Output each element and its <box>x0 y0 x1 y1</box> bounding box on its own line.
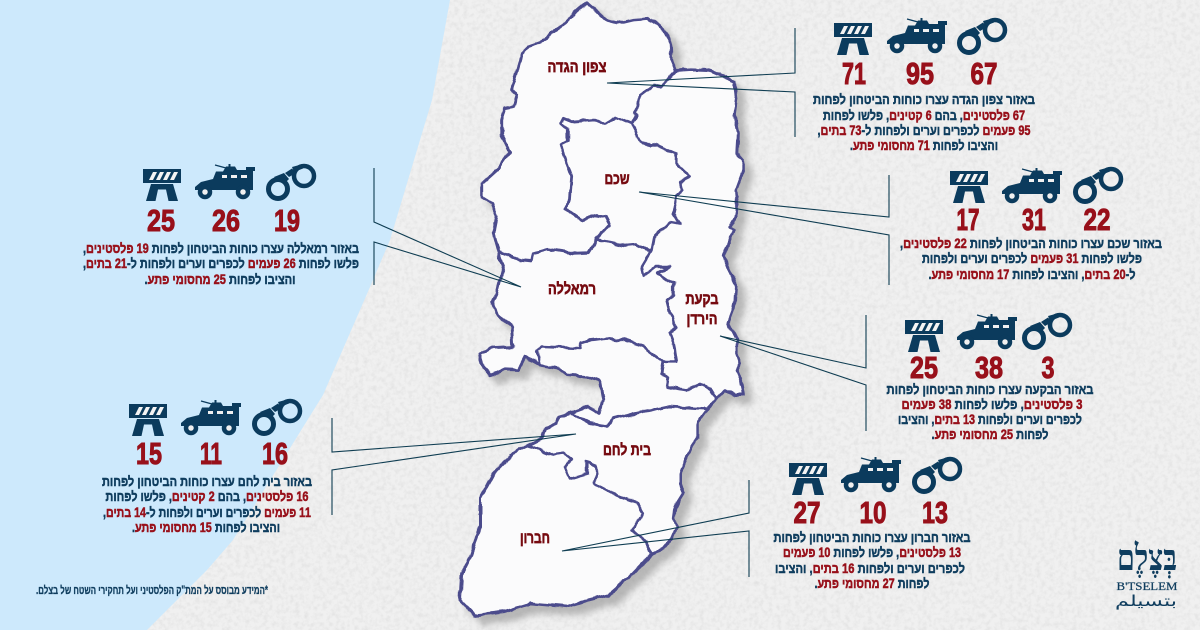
logo: Hebrew wordmark: בְּצֶלֶם <box>1117 538 1177 579</box>
text block: פלשו לפחות 31 פעמים לכפרים וערים ולפחות <box>922 251 1142 266</box>
icon: handcuffs <box>960 18 1005 52</box>
label: Nablus: שכם <box>604 171 630 188</box>
icon: handcuffs <box>1024 313 1070 348</box>
map labels <box>520 59 719 547</box>
text block <box>102 474 312 535</box>
icon: military vehicle <box>887 18 947 51</box>
icon: barricade <box>950 171 988 203</box>
label: northern West Bank: צפון הגדה <box>548 59 606 76</box>
text block: והציבו לפחות 25 מחסומי פתע. <box>144 272 296 287</box>
icon: barricade <box>789 463 827 495</box>
number: detained: 13 <box>922 495 948 530</box>
icon: barricade <box>129 404 167 436</box>
text block: והציבו לפחות 71 מחסומי פתע. <box>850 138 998 153</box>
text block <box>900 236 1162 282</box>
text block <box>813 92 1035 153</box>
text block: 16 פלסטינים, בהם 2 קטינים, פלשו לפחות <box>106 489 309 504</box>
label: Hebron: חברון <box>520 530 550 547</box>
label: Jordan Valley line 1: בקעת <box>686 291 719 308</box>
number: checkpoints: 27 <box>794 495 820 530</box>
text block: באזור בית לחם עצרו כוחות הביטחון לפחות <box>102 474 312 489</box>
icon: military vehicle <box>957 314 1017 347</box>
text block: פלשו לפחות 26 פעמים לכפרים וערים ולפחות ל-21 בתים, <box>83 256 359 271</box>
sea <box>0 0 450 630</box>
icon: barricade <box>834 23 872 55</box>
text block: באזור שכם עצרו כוחות הביטחון לפחות 22 פלסטינים, <box>900 236 1162 251</box>
text block: 67 פלסטינים, בהם 6 קטינים, פלשו לפחות <box>823 108 1025 123</box>
panel: Jordan Valley <box>886 313 1094 442</box>
number: detained: 3 <box>1042 350 1054 385</box>
number: raids: 38 <box>975 350 1003 385</box>
text block: באזור צפון הגדה עצרו כוחות הביטחון לפחות <box>813 92 1035 107</box>
text block: 3 פלסטינים, פלשו לפחות 38 פעמים <box>902 397 1083 412</box>
text block <box>886 382 1094 442</box>
panel: Nablus <box>900 167 1162 282</box>
internal district borders <box>499 71 717 553</box>
icon: handcuffs <box>254 399 300 434</box>
number: detained: 16 <box>262 436 288 471</box>
icon: barricade <box>905 320 943 352</box>
number: raids: 26 <box>212 203 240 238</box>
text block: באזור הבקעה עצרו כוחות הביטחון לפחות <box>886 382 1094 397</box>
text block <box>83 241 359 287</box>
label: Jordan Valley line 2: הירדן <box>686 311 718 328</box>
icon: handcuffs <box>268 164 314 198</box>
text block: באזור רמאללה עצרו כוחות הביטחון לפחות 19 פלסטינים, <box>83 241 359 256</box>
panel: Ramallah <box>83 164 359 287</box>
number: raids: 95 <box>906 56 934 91</box>
number: detained: 67 <box>970 56 998 91</box>
text block: והציבו לפחות 15 מחסומי פתע. <box>132 520 280 535</box>
number: detained: 19 <box>274 203 300 238</box>
leader lines: Ramallah <box>374 168 521 287</box>
text block: לפחות 25 מחסומי פתע. <box>932 427 1049 442</box>
logo: B'Tselem <box>1115 538 1178 610</box>
panel: northern West Bank <box>813 18 1035 153</box>
label: Bethlehem: בית לחם <box>603 442 651 459</box>
leader lines: Bethlehem <box>332 418 576 515</box>
icon: military vehicle <box>195 164 255 197</box>
leader lines: Hebron <box>562 480 749 577</box>
text block: 95 פעמים לכפרים וערים ולפחות ל-73 בתים, <box>818 123 1031 138</box>
number: detained: 22 <box>1084 202 1110 237</box>
number: raids: 31 <box>1022 202 1046 237</box>
leader lines: Nablus <box>639 175 889 285</box>
panel: Hebron <box>774 457 971 591</box>
footnote: *המידע מבוסס על המת"ק הפלסטיני ועל תחקירי השטח של בצלם. <box>36 584 268 597</box>
icon: military vehicle <box>841 457 901 490</box>
text block <box>774 530 971 591</box>
leader lines: Jordan Valley <box>720 315 866 431</box>
text block: 11 פעמים לכפרים וערים ולפחות ל-14 בתים, <box>103 505 311 520</box>
panel: Bethlehem <box>102 399 312 535</box>
text block: לכפרים וערים ולפחות 16 בתים, והציבו <box>775 561 965 576</box>
text block: לכפרים וערים ולפחות 13 בתים, והציבו <box>898 412 1082 427</box>
map of the West Bank <box>460 3 743 615</box>
number: raids: 11 <box>200 436 222 471</box>
text block: ל-20 בתים, והציבו לפחות 17 מחסומי פתע. <box>928 267 1136 282</box>
text block: 13 פלסטינים, פלשו לפחות 10 פעמים <box>783 545 961 560</box>
number: checkpoints: 25 <box>147 203 175 238</box>
logo: Arabic wordmark: بتسيلم <box>1115 592 1177 610</box>
number: checkpoints: 25 <box>910 350 938 385</box>
icon: military vehicle <box>1002 168 1062 201</box>
text block: באזור חברון עצרו כוחות הביטחון לפחות <box>774 530 971 545</box>
text block: לפחות 27 מחסומי פתע. <box>814 576 930 591</box>
icon: handcuffs <box>914 457 960 492</box>
leader lines: northern West Bank <box>607 28 795 137</box>
number: checkpoints: 17 <box>956 202 980 237</box>
number: checkpoints: 71 <box>842 56 866 91</box>
number: checkpoints: 15 <box>136 436 162 471</box>
number: raids: 10 <box>860 495 886 530</box>
logo: Latin wordmark: B'TSELEM <box>1116 581 1178 593</box>
icon: military vehicle <box>181 400 241 433</box>
icon: barricade <box>143 169 181 201</box>
map outline <box>460 3 743 615</box>
label: Ramallah: רמאללה <box>548 281 596 298</box>
icon: handcuffs <box>1076 167 1121 202</box>
